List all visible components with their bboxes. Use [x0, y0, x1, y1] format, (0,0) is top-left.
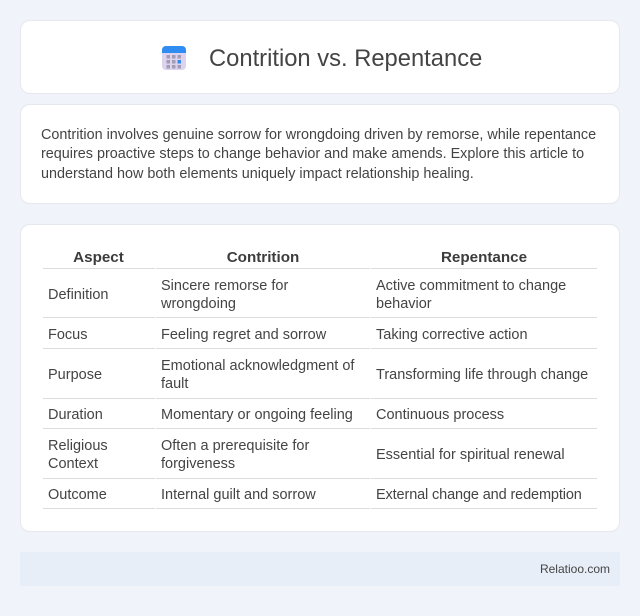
row: Outcome: Outcome: [48, 487, 107, 503]
row: Definition: Sincere remorse for: [161, 278, 288, 294]
title: Contrition vs. Repentance: [209, 45, 482, 72]
row: Purpose: fault: [161, 376, 188, 392]
footer bar: [20, 552, 620, 586]
row: Purpose: Emotional acknowledgment of: [161, 358, 354, 374]
row: Definition: Active commitment to change: [376, 278, 566, 294]
row: Purpose: Purpose: [48, 367, 102, 383]
table header: Repentance: [441, 249, 527, 266]
row: Duration: [48, 407, 504, 423]
row: Duration: Momentary or ongoing feeling: [161, 407, 353, 423]
row: Definition: wrongdoing: [161, 296, 236, 312]
row: Purpose: Transforming life through change: [376, 367, 588, 383]
row: Duration: Duration: [48, 407, 103, 423]
panel: intro text: [20, 104, 620, 204]
intro paragraph: requires proactive steps to change behavior and make amends. Explore this article to: [41, 146, 584, 162]
row: Religious Context: Essential for spiritual renewal: [376, 447, 565, 463]
row: Definition: behavior: [376, 296, 432, 312]
intro paragraph: [41, 126, 596, 182]
row: Religious Context: Context: [48, 456, 98, 472]
row: Focus: Feeling regret and sorrow: [161, 327, 326, 343]
row: Focus: Taking corrective action: [376, 327, 528, 343]
table header: Contrition: [227, 249, 299, 266]
row: Definition: [48, 278, 566, 312]
row: Religious Context: Religious: [48, 438, 108, 454]
row: Purpose: [48, 358, 588, 392]
row: Definition: Definition: [48, 287, 108, 303]
row: Outcome: Internal guilt and sorrow: [161, 487, 316, 503]
footer credit: Relatioo.com: [540, 562, 610, 576]
table header: Aspect: [73, 249, 124, 266]
panel: comparison table: [20, 224, 620, 532]
table header: [73, 249, 527, 266]
row: Outcome: [48, 487, 582, 503]
row: Outcome: External change and redemption: [376, 487, 582, 503]
icon: calendar: [162, 46, 186, 70]
row: Focus: Focus: [48, 327, 88, 343]
panel: header card: [20, 20, 620, 94]
intro paragraph: understand how both elements uniquely impact relationship healing.: [41, 166, 474, 182]
intro paragraph: Contrition involves genuine sorrow for wrongdoing driven by remorse, while repentance: [41, 126, 596, 142]
row: Religious Context: [48, 438, 565, 472]
row: Focus: [48, 327, 528, 343]
row: Duration: Continuous process: [376, 407, 504, 423]
row: Religious Context: forgiveness: [161, 456, 235, 472]
row: Religious Context: Often a prerequisite for: [161, 438, 309, 454]
